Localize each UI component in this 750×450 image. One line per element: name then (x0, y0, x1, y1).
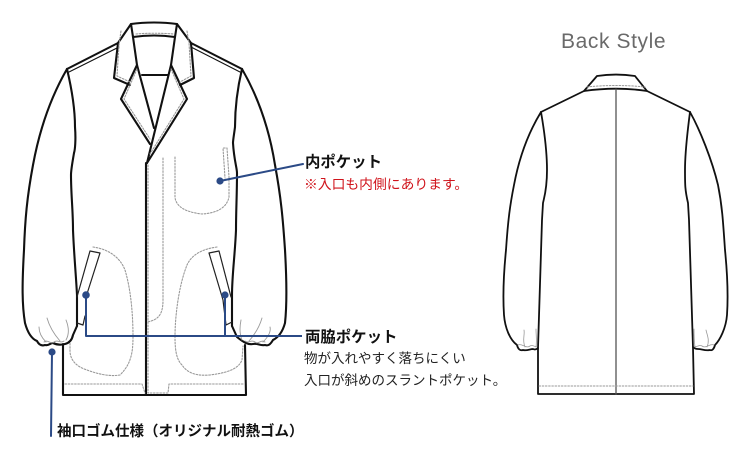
front jacket outline (23, 22, 287, 395)
side pockets description: 物が入れやすく落ちにくい (304, 351, 466, 366)
inner pocket label: 内ポケット (305, 154, 382, 171)
side pockets description (304, 351, 506, 388)
pocket flaps (77, 251, 232, 325)
stitching and hidden pockets (65, 31, 243, 393)
back jacket outline (503, 74, 728, 394)
inner pocket note: ※入口も内側にあります。 (304, 177, 468, 192)
cuff gathers (39, 318, 270, 343)
back cuff gathers (518, 329, 714, 347)
leader: inner pocket (216, 164, 303, 185)
back style heading: Back Style (561, 30, 666, 53)
front jacket illustration (23, 22, 287, 395)
side pockets description: 入口が斜めのスラントポケット。 (304, 373, 506, 388)
elastic cuff label: 袖口ゴム仕様（オリジナル耐熱ゴム） (57, 424, 304, 440)
leader: side pockets (82, 291, 302, 336)
back stitching (539, 86, 693, 386)
back centre seam (615, 89, 617, 394)
back jacket illustration (503, 74, 728, 394)
leader: elastic cuff (48, 348, 56, 436)
side pockets label: 両脇ポケット (305, 329, 397, 346)
